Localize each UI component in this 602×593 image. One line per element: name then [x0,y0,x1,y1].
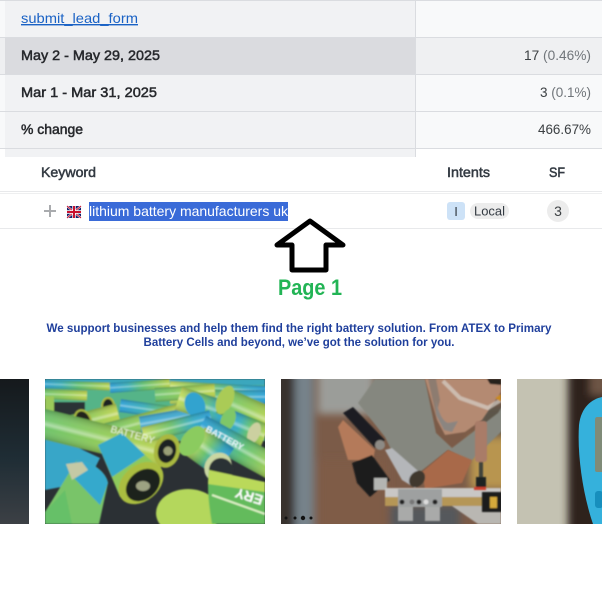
long battery with white label [36,408,213,471]
image: blue handheld device [517,379,602,524]
worker arm [422,450,472,489]
icon: plus [44,205,56,217]
large centre battery [97,432,164,506]
highlighted keyword: lithium battery manufacturers uk [89,203,289,219]
device body [579,397,602,524]
image: dark panel left [0,379,29,524]
battery labels: ERY [233,485,265,508]
wood board and jig [385,488,501,524]
arrow pointing up [277,221,343,270]
right battery with label [200,416,265,479]
intro text [46,323,552,349]
intro text: We support businesses and help them find the right battery solution. From ATEX to Primary [46,323,552,335]
image: green and blue batteries [45,379,265,524]
battery row, upper middle [71,385,265,446]
column headers [41,164,565,180]
carousel dots [284,516,312,520]
front right battery [208,470,265,524]
row: Mar 1 - Mar 31, 2025 [21,84,591,100]
keyword table [0,164,602,229]
icon: UK flag [67,206,81,218]
column headers: Keyword [41,164,96,180]
page label: Page 1 [278,275,342,300]
row: May 2 - May 29, 2025: 17 (0.46%) [524,47,591,63]
row: % change: 466.67% [538,121,591,137]
row: May 2 - May 29, 2025: May 2 - May 29, 2025 [21,47,160,63]
column headers: Intents [447,164,490,180]
row: % change: % change [21,121,83,137]
SF badge [547,200,569,222]
short battery, middle right [178,425,234,479]
worker face [425,379,501,435]
intent badge [447,202,465,220]
device button [595,491,602,508]
column headers: SF [549,164,565,180]
front left battery [45,460,108,524]
front lime battery [155,488,217,524]
drill [338,407,428,497]
battery labels: BATTERY [109,424,156,447]
intent badge: I [454,204,458,219]
left blue battery [45,432,100,490]
row: Mar 1 - Mar 31, 2025: Mar 1 - Mar 31, 2025 [21,84,157,100]
image: man using cordless drill [281,379,501,524]
analytics table [0,0,602,157]
row: May 2 - May 29, 2025 [21,47,591,63]
SF badge: 3 [554,203,562,219]
device screen [595,417,602,472]
battery labels [109,424,265,508]
row: % change [21,121,591,137]
event name link: submit_lead_form [21,10,138,26]
worker torso [358,379,503,472]
local badge: Local [474,204,505,218]
clamp [474,421,502,512]
battery labels: BATTERY [204,424,245,452]
row: Mar 1 - Mar 31, 2025: 3 (0.1%) [540,84,591,100]
back rows of batteries [40,379,270,441]
intro text: Battery Cells and beyond, we’ve got the solution for you. [144,337,454,349]
